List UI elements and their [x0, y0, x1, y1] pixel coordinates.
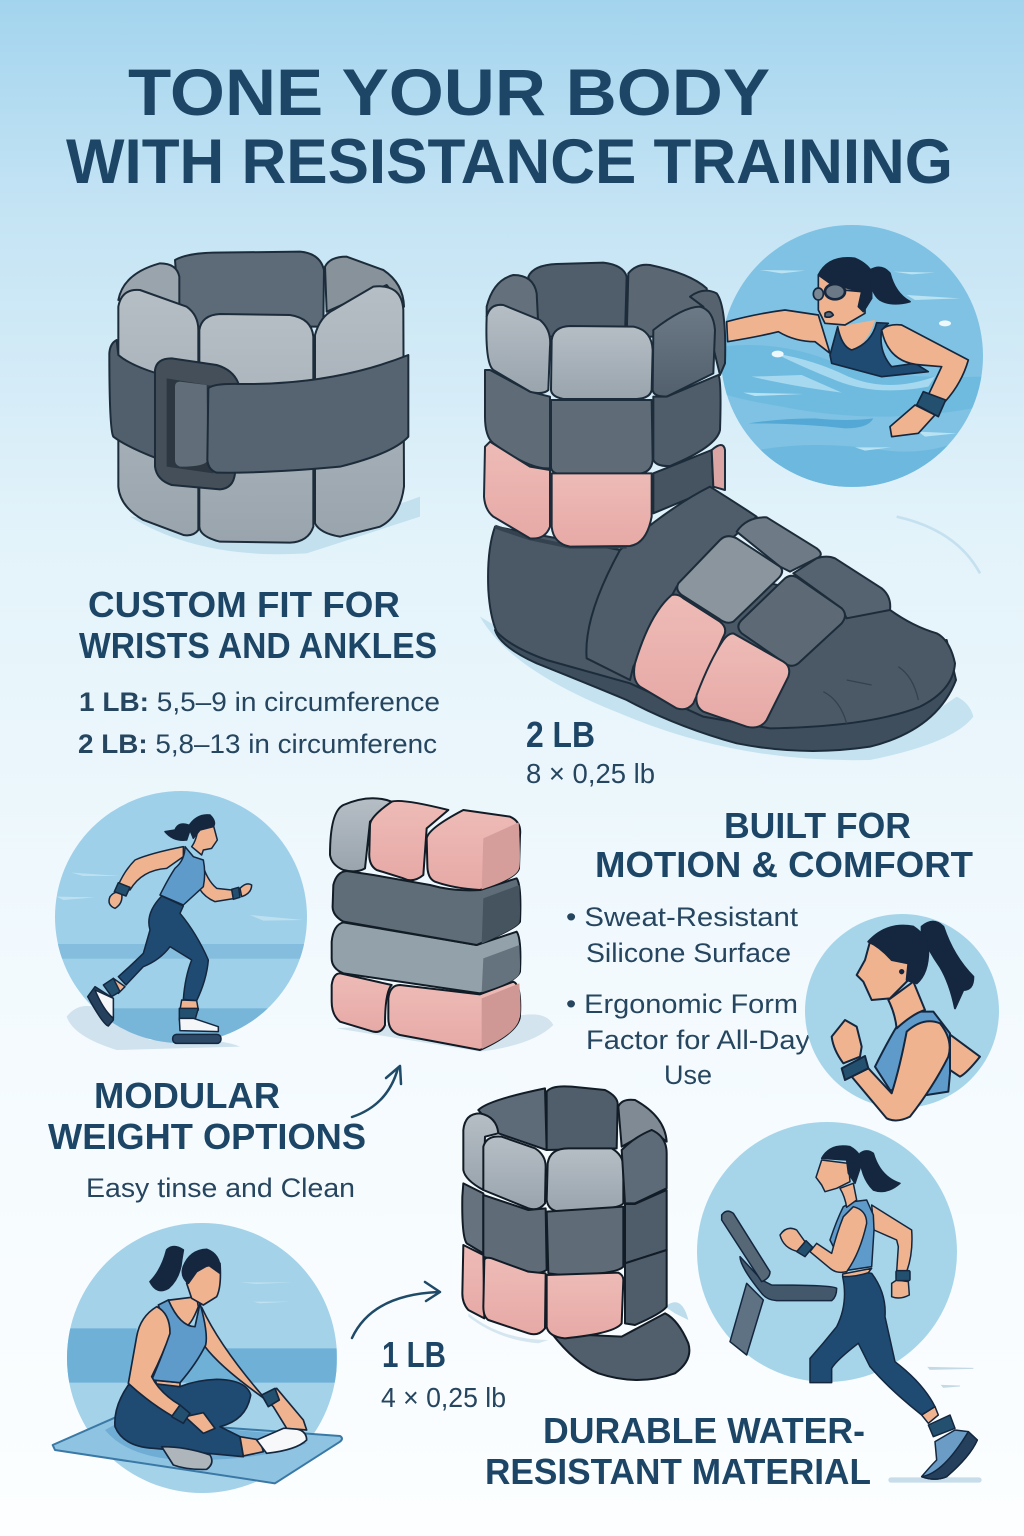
text block: modular weight options — [48, 1075, 366, 1203]
illustration: 1 lb band — [462, 1086, 689, 1380]
illustration: swimmer circle — [721, 225, 983, 487]
text block: 1 lb: 1 LB — [382, 1334, 446, 1375]
illustration: stretching woman circle — [53, 1223, 342, 1493]
text block: modular weight options: Easy tinse and Clean — [86, 1173, 355, 1203]
text block: built for motion: Factor for All-Day — [586, 1025, 811, 1055]
text block: built for motion: MOTION & COMFORT — [595, 844, 973, 885]
text block: 2 lb — [526, 714, 655, 789]
illustration: roller runner circle — [50, 791, 310, 1050]
text block: durable material: DURABLE WATER- — [543, 1410, 865, 1451]
arrow: to 1 lb band — [352, 1282, 440, 1338]
text block: custom fit: 2 LB: 5,8–13 in circumferenc — [78, 729, 437, 759]
text block: modular weight options: WEIGHT OPTIONS — [48, 1116, 366, 1157]
text block: built for motion — [566, 805, 973, 1090]
text block: custom fit: CUSTOM FIT FOR — [88, 584, 400, 625]
illustration: side profile woman circle — [805, 914, 999, 1120]
text block: 1 lb: 4 × 0,25 lb — [381, 1382, 506, 1413]
text block: built for motion: Silicone Surface — [586, 938, 791, 968]
title — [66, 55, 953, 197]
title: TONE YOUR BODY — [128, 55, 770, 129]
illustration: treadmill runner circle — [697, 1122, 982, 1483]
text block: built for motion: • Sweat-Resistant — [566, 902, 799, 932]
text block: durable material — [485, 1410, 871, 1492]
text block: 2 lb: 2 LB — [526, 714, 595, 755]
text block: custom fit: WRISTS AND ANKLES — [79, 625, 437, 666]
text block: 2 lb: 8 × 0,25 lb — [526, 758, 655, 789]
text block: modular weight options: MODULAR — [94, 1075, 280, 1116]
text block: custom fit: 1 LB: 5,5–9 in circumference — [79, 687, 440, 717]
text block: custom fit — [78, 584, 440, 759]
illustration: stacked modular blocks — [330, 798, 553, 1052]
arrow: to stacked blocks — [352, 1066, 401, 1117]
title: WITH RESISTANCE TRAINING — [66, 127, 953, 197]
text block: built for motion: • Ergonomic Form — [566, 989, 798, 1019]
text block: 1 lb — [381, 1334, 506, 1413]
text block: durable material: RESISTANT MATERIAL — [485, 1451, 871, 1492]
illustration: ankle weight on foot — [480, 263, 980, 760]
text block: built for motion: Use — [664, 1060, 712, 1090]
text block: built for motion: BUILT FOR — [724, 805, 911, 846]
illustration: wrist band — [109, 252, 420, 554]
